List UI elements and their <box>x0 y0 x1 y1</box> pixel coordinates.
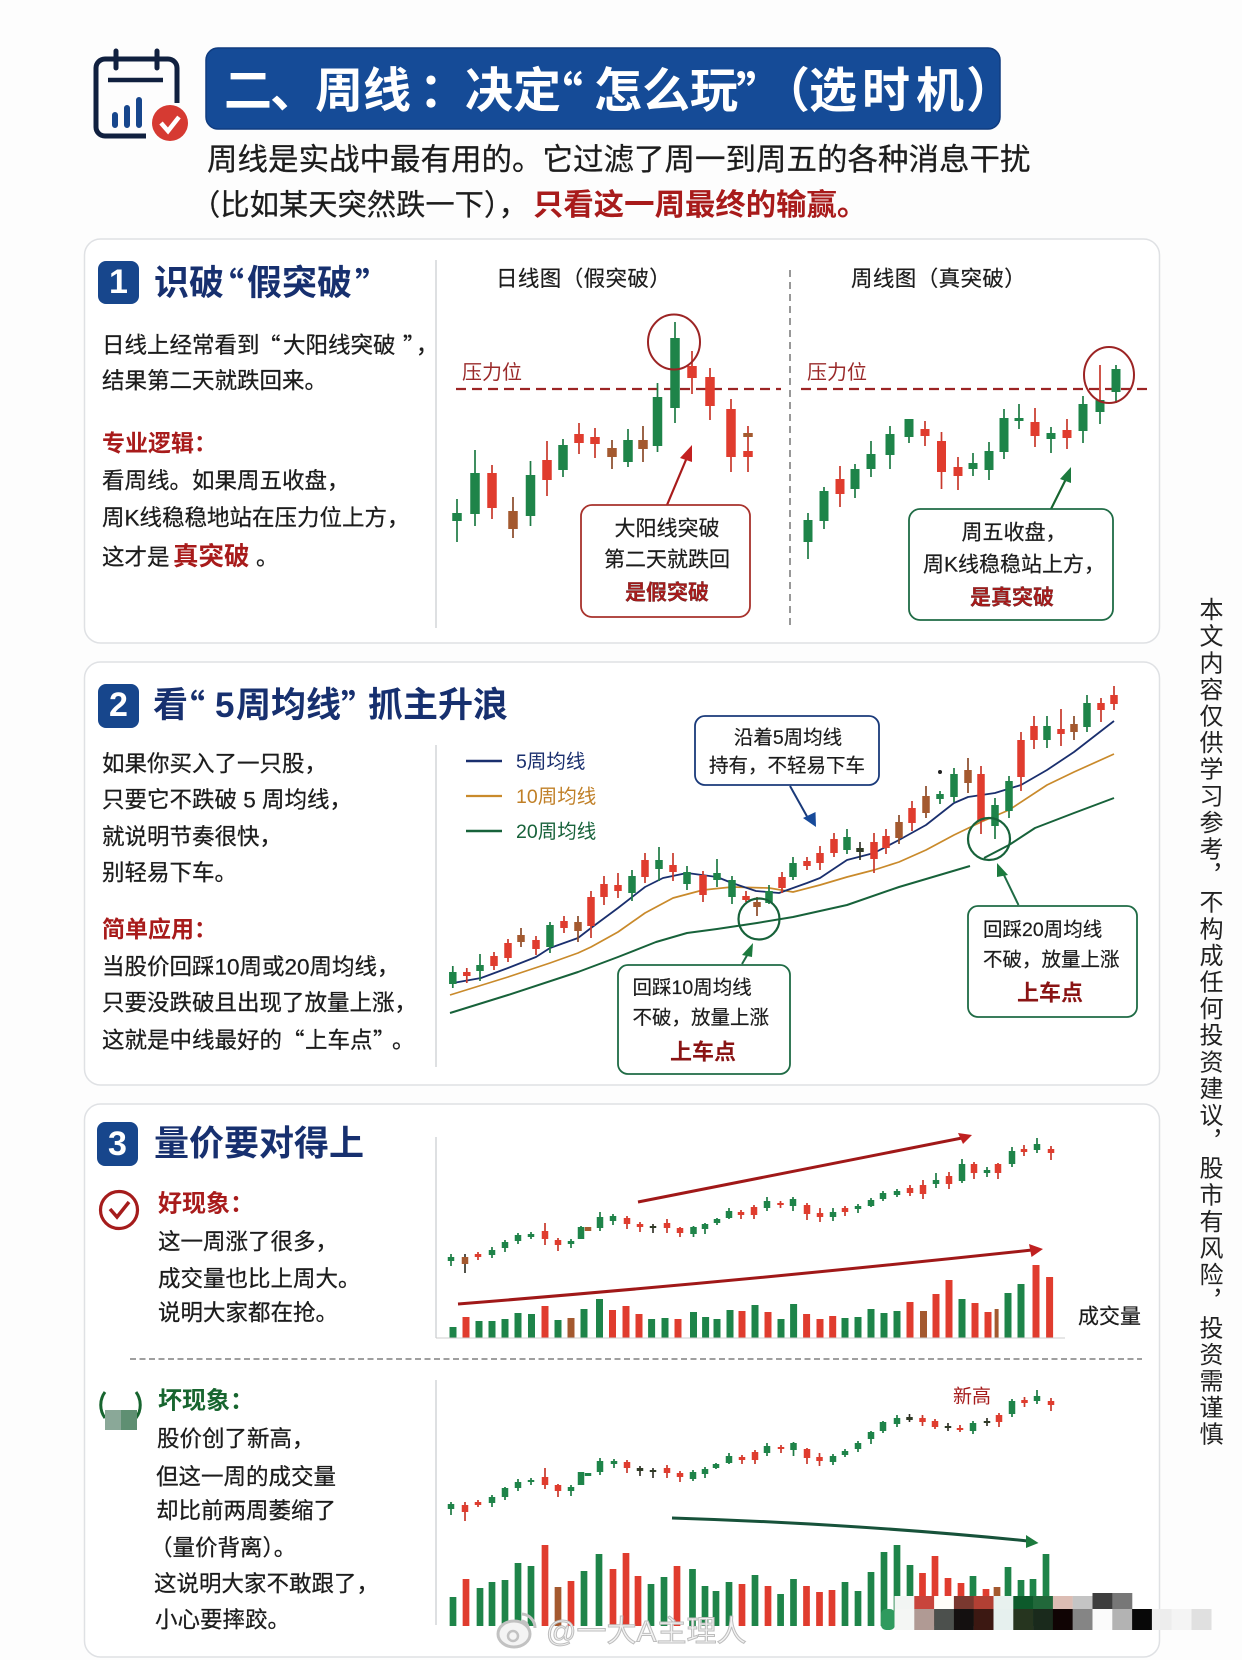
arrow: 价格上涨 <box>638 1133 972 1202</box>
arrow: 成交量放大 <box>458 1244 1043 1304</box>
text block: 说明: 真突破 <box>173 543 250 571</box>
heading 2: “ <box>170 680 205 730</box>
text block: 说明: “ <box>282 1024 305 1056</box>
badge 3 <box>97 1122 138 1166</box>
title banner: 机 <box>916 64 964 118</box>
icon: blurred bad sign <box>101 1392 140 1430</box>
title banner: ” <box>736 56 784 126</box>
text block: 坏现象: 但这一周的成交量 <box>156 1464 336 1490</box>
callout: 是真突破: 周K线稳稳站上方， <box>923 554 1105 576</box>
text block: 说明: 。 <box>256 544 279 570</box>
legend: 10周均线 <box>516 786 596 808</box>
panel: 识破假突破 <box>84 239 1160 643</box>
legend: 20周均线 <box>516 821 596 843</box>
title banner: “ <box>535 56 583 126</box>
circle: 回踩20周 <box>968 818 1010 860</box>
intro text: （比如某天突然跌一下）， <box>191 188 528 222</box>
callout: 回踩20周均线 <box>968 906 1137 1017</box>
text block: 说明: 结果第二天就跌回来。 <box>102 368 327 394</box>
text block: 坏现象: 股价创了新高， <box>157 1426 315 1452</box>
text block: 坏现象 <box>150 1388 379 1632</box>
arrow: 指向真突破 <box>1051 467 1071 509</box>
heading 3: 量价要对得上 <box>154 1124 364 1164</box>
callout: 是真突破: 是真突破 <box>970 586 1054 610</box>
callout: 回踩20周均线: 回踩20周均线 <box>983 919 1102 941</box>
text block: 说明: ” <box>403 329 426 361</box>
callout: 是真突破 <box>909 509 1113 620</box>
text block: 说明: 看周线。如果周五收盘， <box>102 468 350 494</box>
title banner: ） <box>966 64 1014 118</box>
label: 新高: 新高 <box>953 1386 991 1408</box>
text block: 说明: 上车点 <box>305 1028 373 1052</box>
callout: 是假突破: 大阳线突破 <box>614 518 720 540</box>
heading 2: 周均线 <box>236 686 341 724</box>
callout: 是假突破: 第二天就跌回 <box>604 548 730 572</box>
intro text: 只看这一周最终的输赢。 <box>533 188 867 222</box>
volume bars <box>453 1265 1050 1338</box>
icon: calendar with check <box>96 51 188 141</box>
text block: 说明 <box>102 752 417 1056</box>
text block: 说明: 专业逻辑： <box>102 430 217 456</box>
callout: 回踩10周均线: 上车点 <box>670 1040 736 1064</box>
title banner: 周线 <box>315 64 411 118</box>
heading 2: 抓主升浪 <box>368 686 508 724</box>
title banner: 选 <box>809 64 857 118</box>
watermark: @一大A主理人 <box>546 1616 746 1648</box>
text block: 说明: ， <box>416 332 439 358</box>
text block: 坏现象: 小心要摔跤。 <box>155 1608 290 1632</box>
chart: 日线图 假突破 <box>456 267 781 617</box>
arrow: 5周均线 <box>790 786 816 827</box>
text block: 说明: 这就是中线最好的 <box>102 1028 282 1052</box>
mosaic patch <box>881 1593 1212 1630</box>
heading 2: ” <box>341 680 376 730</box>
arrow: 成交量萎缩 <box>672 1518 1038 1548</box>
legend <box>466 751 596 843</box>
text block: 说明: 只要它不跌破 5 周均线， <box>102 788 352 812</box>
chart: 周线图 真突破: 压力位 <box>807 361 867 384</box>
text block: 好现象 <box>158 1190 361 1326</box>
candlesticks <box>451 1390 1051 1521</box>
text block: 说明: 这才是 <box>102 544 170 570</box>
text block: 说明: 大阳线突破 <box>283 332 396 358</box>
text block: 说明: ” <box>373 1024 396 1056</box>
heading 2: 看 <box>153 686 188 724</box>
text block: 说明: 。 <box>392 1028 415 1052</box>
text block: 说明: 简单应用： <box>102 916 217 942</box>
candlesticks <box>451 1138 1051 1273</box>
text block: 好现象: 这一周涨了很多， <box>158 1230 338 1254</box>
heading 1: 识破 <box>154 264 224 302</box>
callout: 回踩10周均线 <box>618 965 790 1074</box>
intro text: 周线是实战中最有用的。它过滤了周一到周五的各种消息干扰 <box>207 143 1030 177</box>
arrow: 指向假突破 <box>667 445 692 505</box>
legend: 5周均线 <box>516 751 585 773</box>
arrow: 回踩20周 <box>997 863 1018 905</box>
badge 1 <box>98 261 139 304</box>
title banner: 、 <box>270 64 318 118</box>
volume bars <box>453 1545 1046 1626</box>
side disclaimer: 本文内容仅供学习参考，不构成任何投资建议，股市有风险，投资需谨慎 <box>1195 597 1222 1448</box>
title banner: 时 <box>862 64 910 118</box>
title banner: （ <box>762 64 810 118</box>
text block: 坏现象: 这说明大家不敢跟了， <box>154 1572 379 1596</box>
candlesticks <box>453 686 1114 988</box>
chart: 均线与K线 <box>450 686 1137 1074</box>
title banner: 决定 <box>465 64 561 118</box>
title banner <box>206 48 1014 129</box>
panel: 看5周均线抓主升浪 <box>84 662 1160 1085</box>
text block: 说明: 如果你买入了一只股， <box>102 752 327 776</box>
candlesticks <box>808 365 1116 559</box>
chart: 日线图 假突破: 压力位 <box>462 361 522 384</box>
candlesticks <box>457 322 748 542</box>
badge 2: 2 <box>109 686 128 724</box>
chart: 周线图 真突破: 周线图（真突破） <box>851 267 1026 291</box>
heading 2: 5 <box>215 686 234 724</box>
chart: 日线图 假突破: 日线图（假突破） <box>496 267 671 291</box>
callout: 回踩20周均线: 上车点 <box>1017 980 1083 1006</box>
icon: red check <box>100 1192 138 1228</box>
5 week line <box>453 721 1114 983</box>
text block: 好现象: 说明大家都在抢。 <box>158 1300 338 1326</box>
callout: 是假突破 <box>581 505 750 617</box>
text block: 好现象: 好现象： <box>158 1190 254 1218</box>
badge 3: 3 <box>108 1125 127 1163</box>
text block: 坏现象: 坏现象： <box>158 1388 254 1414</box>
text block: 说明: 日线上经常看到 <box>102 332 260 358</box>
callout: 沿着5周均线: 持有，不轻易下车 <box>709 755 865 777</box>
callout: 是假突破: 是假突破 <box>625 580 709 604</box>
chart: 周线图 真突破 <box>801 267 1150 620</box>
callout: 是真突破: 周五收盘， <box>962 522 1066 544</box>
callout: 回踩10周均线: 不破，放量上涨 <box>632 1007 769 1029</box>
chart: 好现象 K线与成交量 <box>436 1133 1141 1338</box>
20 week line <box>450 798 1114 1013</box>
badge 1: 1 <box>109 263 128 301</box>
text block: 说明: 别轻易下车。 <box>102 860 237 886</box>
text block: 说明: 就说明节奏很快， <box>102 824 282 850</box>
text block: 说明: 周K线稳稳地站在压力位上方， <box>102 506 410 530</box>
text block: 好现象: 成交量也比上周大。 <box>158 1266 361 1292</box>
chart: 坏现象 量价背离 <box>451 1386 1212 1630</box>
intro text <box>191 143 1030 222</box>
highlight circle <box>1084 347 1134 403</box>
label: 成交量: 成交量 <box>1078 1306 1141 1328</box>
heading 1: “ <box>209 258 244 308</box>
text block: 说明: 当股价回踩10周或20周均线， <box>102 954 400 980</box>
badge 2 <box>98 684 139 728</box>
callout: 沿着5周均线: 沿着5周均线 <box>734 727 842 749</box>
text block: 坏现象: （量价背离）。 <box>150 1536 296 1560</box>
callout: 回踩10周均线: 回踩10周均线 <box>632 977 752 999</box>
title banner: 二 <box>224 64 272 118</box>
text block: 坏现象: 却比前两周萎缩了 <box>156 1498 336 1524</box>
10 week line <box>450 754 1114 995</box>
heading 1: ” <box>355 258 390 308</box>
text block: 说明: 只要没跌破且出现了放量上涨， <box>102 990 417 1016</box>
circle: 回踩10周 <box>738 898 780 940</box>
heading 1: 假突破 <box>247 264 352 302</box>
arrow: 回踩10周 <box>742 943 753 964</box>
title banner: 怎么玩 <box>594 64 738 118</box>
text block: 说明: “ <box>258 329 281 361</box>
callout: 回踩20周均线: 不破，放量上涨 <box>983 949 1120 971</box>
panel: 量价要对得上 <box>84 1104 1212 1657</box>
title banner: ： <box>419 64 467 118</box>
text block: 说明 <box>102 329 439 571</box>
callout: 沿着5周均线 <box>695 716 879 785</box>
highlight circle <box>648 314 700 370</box>
